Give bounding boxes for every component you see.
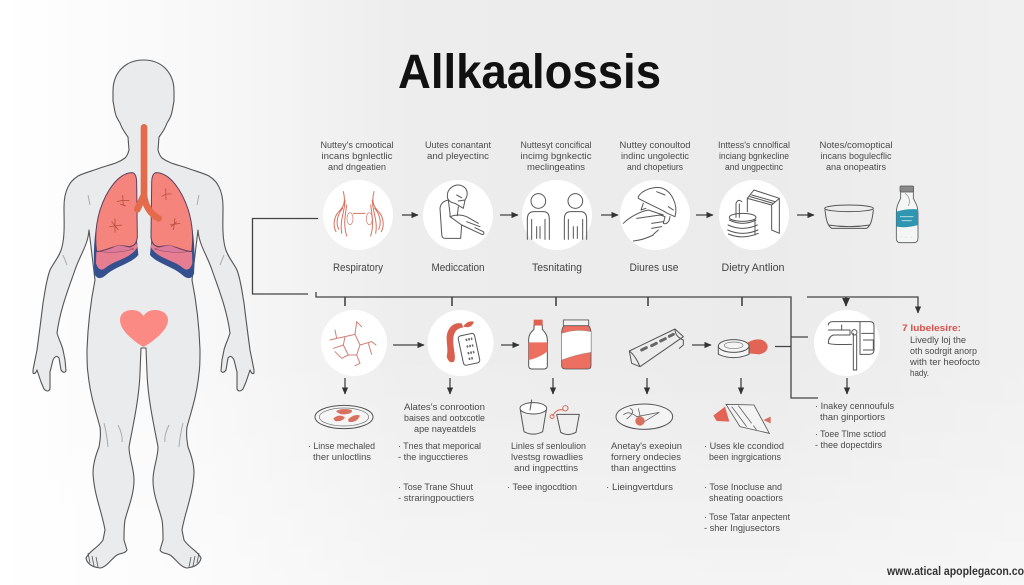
top row labels: Diures use	[630, 262, 678, 274]
top row descriptions: indinc ungolectic	[621, 151, 689, 162]
top row descriptions: Notes/comoptical	[820, 140, 892, 151]
title: Allkaalossis	[398, 46, 661, 99]
top row descriptions: and pleyectinc	[427, 151, 489, 162]
body silhouette	[33, 60, 254, 568]
top row descriptions: and ungpectinc	[725, 162, 783, 173]
icon: medical device	[828, 322, 874, 370]
icon: organ and pill pack	[447, 321, 480, 366]
icon: scissors plate	[616, 404, 673, 429]
bottom row descriptions: · Lieingvertdurs	[606, 482, 673, 493]
bottom row descriptions: · Teee ingocdtion	[507, 482, 577, 493]
icon: water bottle	[896, 186, 918, 243]
icon: bottle and jar	[529, 320, 591, 369]
icon: medication	[440, 185, 484, 238]
arrows bottom	[345, 345, 847, 394]
top row labels: Tesnitating	[532, 262, 582, 274]
bottom row descriptions: ther unloctlins	[313, 452, 371, 463]
side note: Livedly loj the	[910, 335, 966, 346]
top row descriptions: and dngeatien	[328, 162, 386, 173]
bottom row descriptions: Anetay's exeoiun	[611, 441, 682, 452]
top row	[323, 180, 918, 250]
icon: respiratory	[334, 192, 383, 236]
top row descriptions: Nuttey's cmootical	[320, 140, 394, 151]
top row labels: Respiratory	[333, 262, 383, 274]
side note: oth sodrgit anorp	[910, 346, 977, 357]
top row descriptions: Nuttey conoultod	[620, 140, 690, 151]
icon: hand and cap	[623, 187, 676, 241]
bottom row descriptions: · Uses kle ccondiod	[704, 441, 784, 452]
bottom row descriptions: · Tnes that meporical	[398, 441, 481, 452]
icon: cups	[520, 400, 579, 434]
top row descriptions	[320, 140, 892, 173]
top row descriptions: ana onopeatirs	[826, 162, 886, 173]
bottom row descriptions: Alates's conrootion	[404, 402, 485, 413]
bottom row descriptions: - sher Ingjusectors	[704, 523, 780, 534]
bottom row descriptions: Linles sf senloulion	[511, 441, 586, 452]
top row labels	[333, 262, 784, 274]
side note: 7 Iubelesire:	[902, 323, 961, 334]
bottom row descriptions: been ingrgications	[709, 452, 781, 463]
icon: packet	[713, 404, 771, 433]
icon: pill dish	[718, 339, 768, 358]
top row descriptions: inciang bgnkecline	[719, 151, 789, 162]
icon: plate with food	[315, 405, 373, 429]
bottom row descriptions	[308, 401, 894, 534]
bottom row descriptions: fornery ondecies	[611, 452, 681, 463]
icon: two people	[527, 194, 587, 239]
icon: bowl	[825, 205, 873, 228]
bottom row descriptions: - thee dopectdirs	[815, 440, 882, 451]
top row labels: Mediccation	[432, 262, 484, 274]
circles bottom	[321, 310, 880, 376]
top row descriptions: Uutes conantant	[425, 140, 491, 151]
bottom row descriptions: · Tose Tatar anpectent	[704, 512, 790, 523]
top row descriptions: Nuttesyt concifical	[520, 140, 592, 151]
bottom row descriptions: - the ingucctieres	[398, 452, 468, 463]
bottom row descriptions: · Toee Tlme sctiod	[815, 429, 886, 440]
icon: network	[330, 322, 376, 366]
top row labels: Dietry Antlion	[722, 262, 784, 274]
top row descriptions: incans bogulecflic	[820, 151, 892, 162]
top row descriptions: meclingeatins	[527, 162, 585, 173]
bottom row descriptions: baises and ootxcotle	[404, 413, 485, 424]
bottom row descriptions: · Tose Trane Shuut	[398, 482, 473, 493]
bottom row descriptions: lvestsg rowadlies	[511, 452, 583, 463]
top row descriptions: incans bgnlectlic	[322, 151, 393, 162]
human body figure	[33, 60, 254, 568]
bottom row	[315, 310, 880, 434]
side note	[902, 323, 980, 379]
side note: hady.	[910, 368, 929, 379]
bottom row descriptions: ape nayeatdels	[414, 424, 476, 435]
bottom row descriptions: - straringpouctiers	[398, 493, 474, 504]
bottom row descriptions: · Inakey cennoufuls	[815, 401, 894, 412]
side note: with ter heofocto	[909, 357, 980, 368]
lungs and trachea	[94, 127, 194, 278]
icon: plates and box	[728, 190, 779, 237]
top row descriptions: incimg bgnkectic	[520, 151, 592, 162]
top row descriptions: Inttess's cnnolfical	[718, 140, 790, 151]
bottom row descriptions: · Linse mechaled	[308, 441, 375, 452]
bottom row descriptions: than angecttins	[611, 463, 676, 474]
bottom row descriptions: and ingpecttins	[514, 463, 578, 474]
bottom row descriptions: than ginportiors	[820, 412, 885, 423]
circles top	[323, 180, 789, 250]
bottom row descriptions: sheating ooactiors	[709, 493, 783, 504]
top row descriptions: and chopetiurs	[627, 162, 683, 173]
icon: pill tube	[629, 329, 683, 367]
connector lines	[252, 218, 918, 398]
heart	[120, 310, 168, 347]
arrows top	[402, 214, 814, 216]
bottom row descriptions: · Tose Inocluse and	[704, 482, 782, 493]
